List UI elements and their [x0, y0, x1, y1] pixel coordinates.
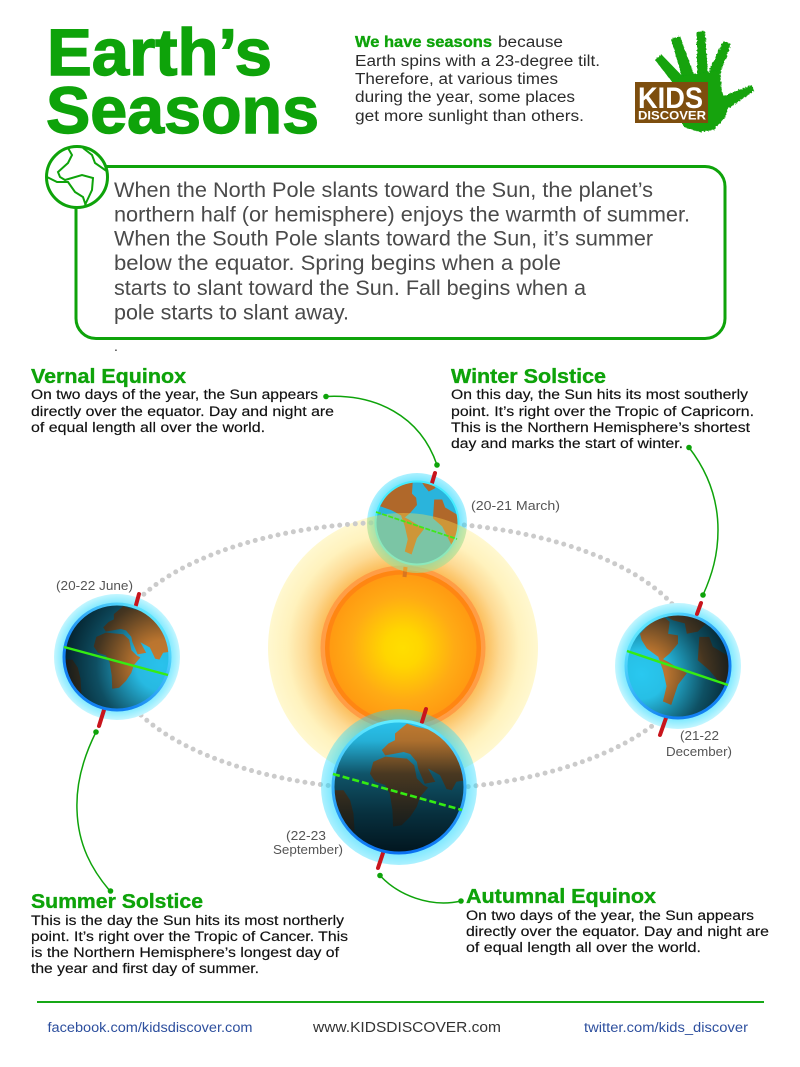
logo badge: [635, 82, 708, 123]
panel outline: [76, 166, 725, 338]
body text: starts to slant toward the Sun. Fall begins when a: [114, 276, 586, 300]
connector: [77, 729, 113, 894]
text: .: [114, 338, 118, 354]
body text: pole starts to slant away.: [114, 300, 349, 324]
panel: explanation box: [46, 146, 725, 338]
callout: Vernal Equinox: [31, 366, 440, 468]
intro text block: because: [498, 34, 563, 51]
sun: [320, 566, 486, 730]
logo: Kids Discover hand: [635, 31, 754, 132]
logo wordmark: KIDS: [638, 82, 703, 115]
body text: When the North Pole slants toward the Sun, the planet’s: [114, 178, 653, 202]
body text: [114, 178, 690, 324]
description: the year and first day of summer.: [31, 961, 259, 976]
footer links: facebook.com/kidsdiscover.com: [48, 1020, 252, 1035]
description: of equal length all over the world.: [466, 940, 701, 955]
callout: Autumnal Equinox: [377, 873, 769, 955]
description: On two days of the year, the Sun appears: [466, 908, 754, 923]
title: Earth’s: [47, 15, 272, 89]
connector: [686, 445, 718, 598]
connector: [323, 394, 440, 468]
date labels: September): [273, 843, 343, 857]
title: Seasons: [46, 73, 319, 147]
icon: globe: [46, 146, 108, 208]
earth: June: [54, 594, 180, 726]
description: point. It’s right over the Tropic of Capricorn.: [451, 404, 754, 419]
heading: Winter Solstice: [451, 366, 606, 388]
description: directly over the equator. Day and night are: [466, 924, 769, 939]
heading: Summer Solstice: [31, 891, 203, 913]
intro text block: [355, 34, 600, 125]
date labels: [56, 499, 732, 857]
earth: December: [615, 603, 741, 735]
footer links: www.KIDSDISCOVER.com: [312, 1020, 501, 1036]
footer links: [48, 1020, 749, 1036]
body text: northern half (or hemisphere) enjoys the warmth of summer.: [114, 202, 690, 226]
callout: Summer Solstice: [31, 729, 348, 976]
description: This is the Northern Hemisphere’s shortest: [451, 420, 750, 435]
description: of equal length all over the world.: [31, 420, 265, 435]
description: [451, 387, 754, 451]
icon: green hand: [655, 31, 754, 132]
callout: Winter Solstice: [451, 366, 754, 598]
date labels: (21-22: [680, 729, 719, 743]
description: directly over the equator. Day and night are: [31, 404, 334, 419]
date labels: (20-22 June): [56, 579, 133, 593]
body text: below the equator. Spring begins when a pole: [114, 251, 561, 275]
date labels: December): [666, 745, 732, 759]
earth: March: [367, 471, 467, 578]
description: point. It’s right over the Tropic of Cancer. This: [31, 929, 348, 944]
description: [466, 908, 769, 955]
intro text block: Earth spins with a 23-degree tilt.: [355, 53, 600, 70]
logo wordmark: DISCOVER: [638, 110, 707, 122]
intro text block: We have seasons: [355, 34, 492, 51]
description: On two days of the year, the Sun appears: [31, 387, 318, 402]
sun glow: [268, 513, 538, 783]
description: day and marks the start of winter.: [451, 436, 683, 451]
footer links: twitter.com/kids_discover: [584, 1020, 749, 1035]
heading: Vernal Equinox: [31, 366, 186, 388]
heading: Autumnal Equinox: [466, 886, 656, 908]
description: [31, 387, 334, 435]
intro text block: Therefore, at various times: [355, 71, 558, 88]
intro text block: get more sunlight than others.: [355, 108, 584, 125]
description: is the Northern Hemisphere’s longest day of: [31, 945, 339, 960]
orbit path: [111, 522, 695, 790]
description: On this day, the Sun hits its most southerly: [451, 387, 748, 402]
title: [46, 15, 319, 147]
intro text block: during the year, some places: [355, 89, 575, 106]
description: [31, 913, 348, 976]
description: This is the day the Sun hits its most northerly: [31, 913, 344, 928]
earth: September: [321, 709, 477, 868]
date labels: (22-23: [286, 829, 326, 843]
connector: [377, 873, 464, 904]
body text: When the South Pole slants toward the Sun, it’s summer: [114, 226, 653, 250]
date labels: (20-21 March): [471, 499, 560, 513]
